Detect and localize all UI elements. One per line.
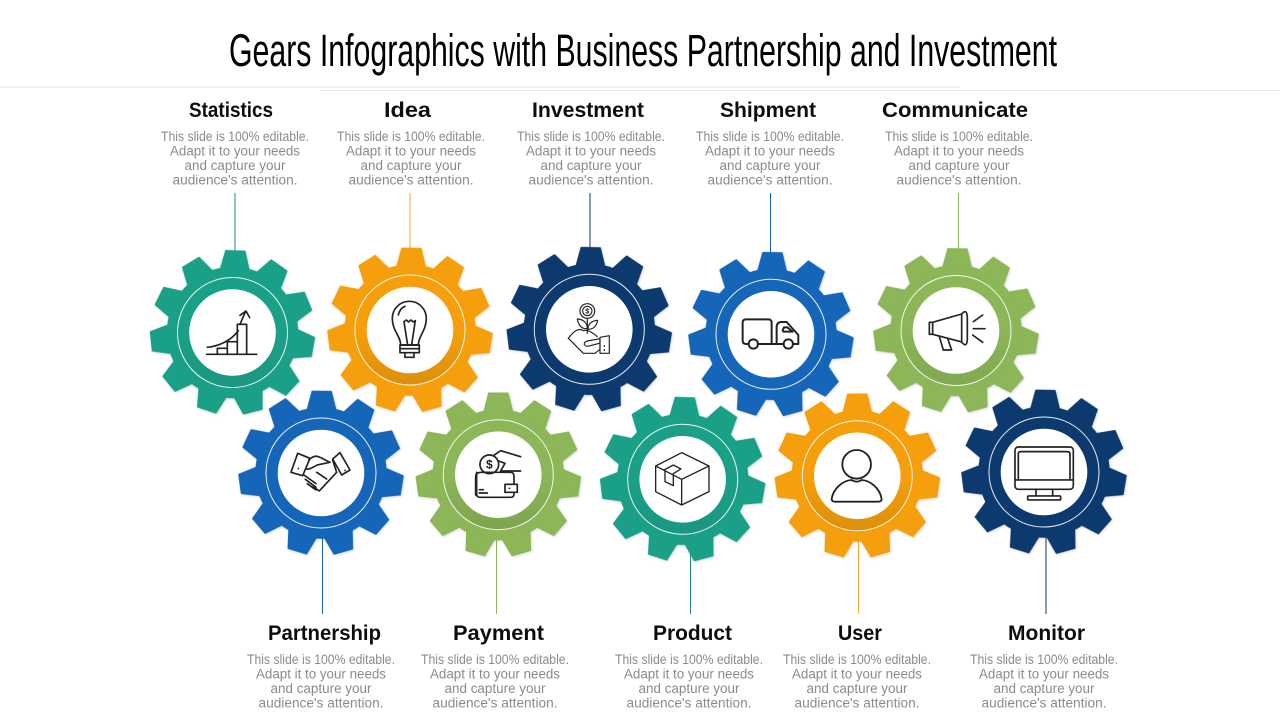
- text block: idea: audience's attention.: [348, 172, 474, 188]
- connector: user: [858, 540, 859, 614]
- connector: shipment: [770, 193, 771, 253]
- text block: monitor: This slide is 100% editable.: [970, 652, 1118, 667]
- heading: payment: Payment: [453, 622, 544, 645]
- heading: product: Product: [653, 622, 732, 645]
- text block: idea: Adapt it to your needs: [346, 144, 476, 158]
- icon: money plant in hand: $: [585, 307, 589, 316]
- text block: payment: [421, 652, 569, 710]
- text block: statistics: and capture your: [184, 158, 286, 173]
- text block: communicate: Adapt it to your needs: [894, 144, 1024, 158]
- text block: shipment: [696, 129, 844, 188]
- text block: shipment: This slide is 100% editable.: [696, 129, 844, 144]
- text block: statistics: This slide is 100% editable.: [161, 129, 309, 144]
- text block: monitor: Adapt it to your needs: [979, 666, 1109, 682]
- text block: product: Adapt it to your needs: [624, 666, 754, 682]
- text block: investment: [517, 129, 665, 188]
- icon: handshake: [291, 453, 350, 491]
- text block: partnership: audience's attention.: [258, 696, 384, 710]
- gear: partnership: [238, 391, 404, 556]
- heading: idea: Idea: [384, 99, 431, 122]
- connector: monitor: [1046, 537, 1047, 614]
- connector: statistics: [234, 193, 236, 251]
- text block: payment: and capture your: [444, 681, 546, 696]
- text block: partnership: Adapt it to your needs: [256, 666, 386, 682]
- heading: shipment: Shipment: [720, 99, 816, 122]
- text block: statistics: Adapt it to your needs: [170, 144, 300, 158]
- gear: communicate: [872, 248, 1040, 414]
- text block: user: and capture your: [806, 681, 908, 696]
- text block: monitor: [970, 652, 1118, 710]
- text block: partnership: This slide is 100% editable.: [247, 652, 395, 667]
- text block: statistics: [161, 129, 309, 188]
- panel: monitor: [960, 389, 1128, 710]
- text block: shipment: audience's attention.: [708, 172, 832, 188]
- text block: product: [615, 652, 763, 710]
- gear: statistics: [147, 248, 318, 418]
- connector: partnership: [322, 538, 323, 614]
- text block: product: This slide is 100% editable.: [615, 652, 763, 667]
- icon: light bulb: [392, 301, 426, 357]
- text block: statistics: audience's attention.: [172, 172, 298, 188]
- icon: wallet with coin: [476, 451, 521, 497]
- gear: user: [775, 394, 940, 558]
- panel: partnership: [238, 391, 404, 710]
- text block: investment: audience's attention.: [528, 172, 654, 188]
- panel: investment: [505, 99, 673, 413]
- heading: partnership: Partnership: [268, 622, 381, 645]
- connector: idea: [410, 193, 411, 249]
- icon: growth chart: [207, 311, 257, 354]
- icon: megaphone: [929, 312, 985, 350]
- heading: communicate: Communicate: [882, 99, 1028, 122]
- icon: money plant in hand: [568, 304, 609, 353]
- text block: communicate: [885, 129, 1033, 188]
- text block: communicate: and capture your: [908, 158, 1010, 173]
- panel: user: [775, 394, 940, 710]
- text block: monitor: audience's attention.: [982, 696, 1106, 710]
- gear: shipment: [687, 251, 855, 418]
- gear: monitor: [960, 389, 1128, 556]
- text block: communicate: This slide is 100% editable.: [885, 129, 1033, 144]
- connector: product: [690, 545, 691, 614]
- heading: investment: Investment: [532, 99, 644, 122]
- gear: investment: [505, 246, 673, 413]
- connector: payment: [496, 540, 497, 614]
- text block: product: and capture your: [638, 681, 740, 696]
- text block: investment: This slide is 100% editable.: [517, 129, 665, 144]
- gear: idea: [326, 247, 494, 414]
- text block: payment: audience's attention.: [432, 696, 558, 710]
- panel: product: [598, 396, 768, 710]
- text block: shipment: and capture your: [720, 158, 821, 173]
- panel: communicate: [872, 99, 1040, 414]
- gear: payment: [416, 393, 581, 557]
- icon: truck: [743, 319, 798, 349]
- icon: box: [656, 453, 709, 505]
- text block: partnership: [247, 652, 395, 710]
- connector: investment: [590, 193, 591, 249]
- panel: statistics: [147, 99, 318, 418]
- text block: communicate: audience's attention.: [896, 172, 1022, 188]
- text block: monitor: and capture your: [994, 681, 1095, 696]
- text block: payment: Adapt it to your needs: [430, 666, 560, 682]
- text block: user: Adapt it to your needs: [792, 666, 922, 682]
- text block: investment: Adapt it to your needs: [526, 144, 656, 158]
- icon: wallet with coin: $: [486, 458, 493, 472]
- heading: statistics: Statistics: [189, 99, 273, 122]
- heading: monitor: Monitor: [1008, 622, 1085, 645]
- icon: monitor: [1015, 447, 1073, 500]
- panel: idea: [326, 99, 494, 414]
- heading: user: User: [838, 622, 882, 645]
- text block: shipment: Adapt it to your needs: [705, 144, 835, 158]
- text block: product: audience's attention.: [626, 696, 752, 710]
- icon: user: [832, 450, 882, 502]
- text block: payment: This slide is 100% editable.: [421, 652, 569, 667]
- gear: product: [598, 396, 768, 564]
- panel: shipment: [687, 99, 855, 418]
- text block: investment: and capture your: [540, 158, 642, 173]
- panel: payment: [416, 393, 581, 710]
- text block: partnership: and capture your: [270, 681, 372, 696]
- text block: idea: [337, 129, 485, 188]
- text block: idea: This slide is 100% editable.: [337, 129, 485, 144]
- text block: idea: and capture your: [360, 158, 462, 173]
- connector: communicate: [958, 193, 959, 249]
- text block: user: [783, 652, 931, 710]
- text block: user: This slide is 100% editable.: [783, 652, 931, 667]
- text block: user: audience's attention.: [794, 696, 920, 710]
